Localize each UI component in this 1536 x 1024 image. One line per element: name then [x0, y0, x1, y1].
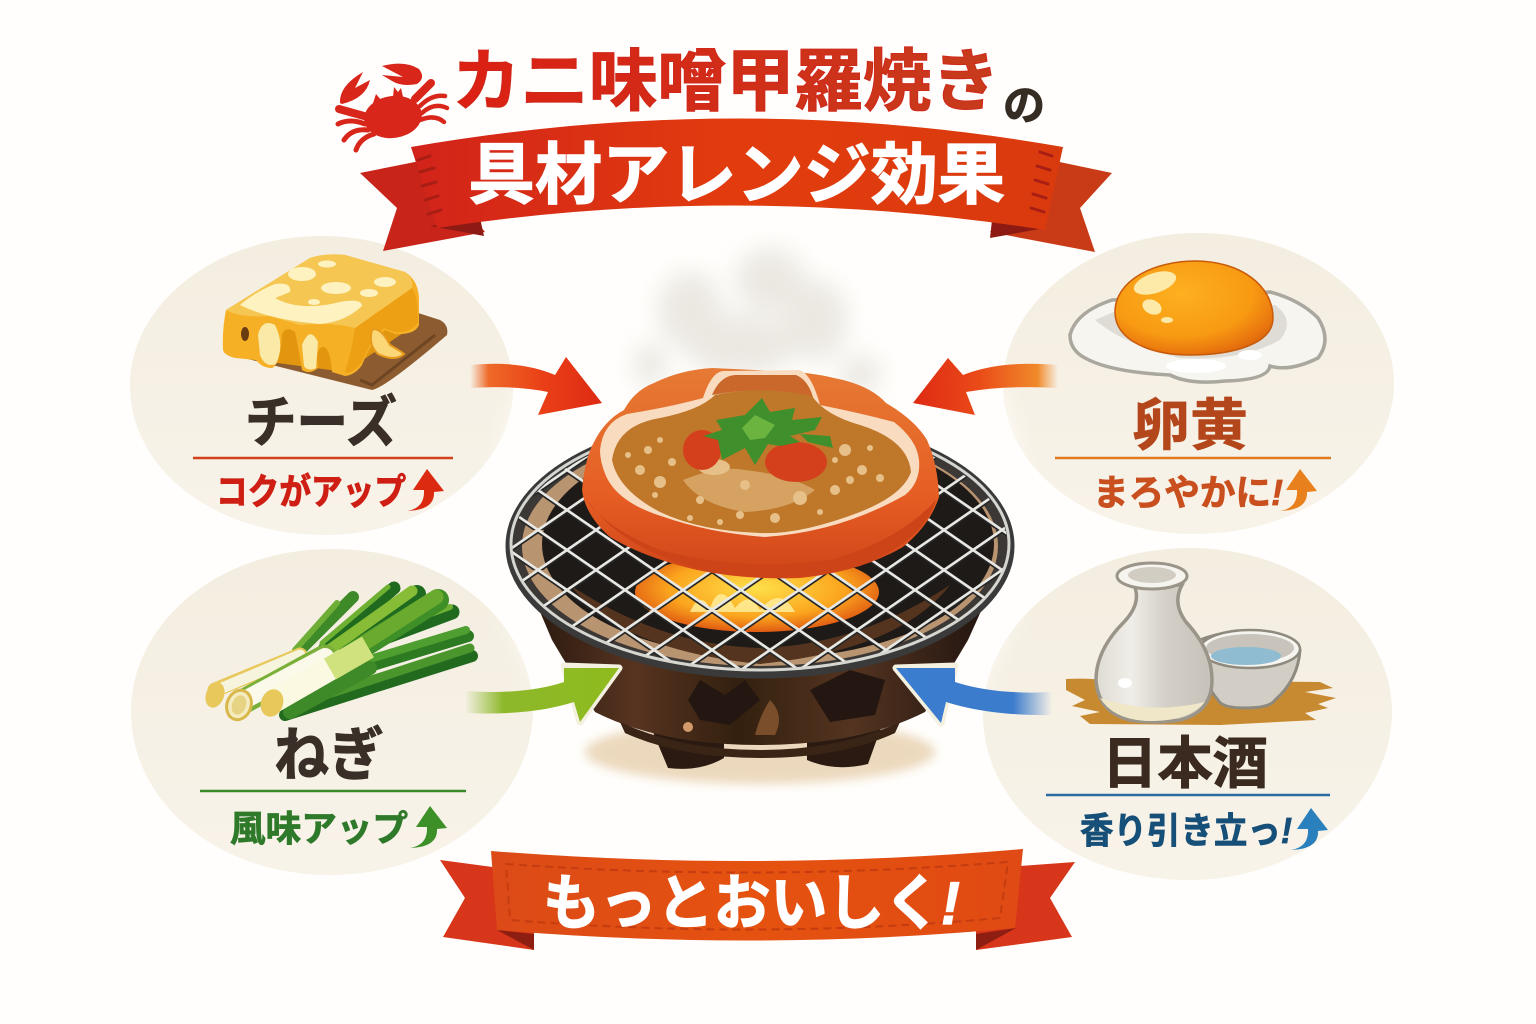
arrow: egg to center — [913, 358, 1058, 415]
cheese circle — [130, 236, 513, 535]
banner: subtitle — [360, 118, 1112, 252]
ground shadow — [585, 720, 935, 784]
tomatoes — [683, 430, 827, 482]
left tail — [440, 860, 534, 950]
icon: egg — [1070, 261, 1325, 382]
effect: green onion: 風味アップ — [230, 808, 408, 849]
arrow: green onion to center — [465, 666, 619, 722]
title: カニ味噌甲羅焼き — [452, 44, 1000, 120]
stitched border — [506, 862, 1008, 930]
right tail — [990, 160, 1112, 252]
icon: up arrow green — [410, 806, 447, 848]
divider: sake — [1046, 794, 1330, 796]
icon: up arrow blue — [1291, 808, 1328, 850]
ribbon body — [491, 849, 1023, 941]
egg circle — [1003, 233, 1394, 534]
grill inner — [508, 416, 1012, 676]
left tail — [360, 160, 485, 251]
divider: egg yolk — [1055, 457, 1331, 459]
effect: cheese: コクがアップ — [216, 471, 406, 512]
crab miso filling — [612, 390, 911, 533]
arrow: sake to center — [896, 666, 1052, 723]
label: cheese: チーズ — [245, 391, 397, 454]
panel: green onion — [131, 549, 533, 875]
effect: sake: 香り引き立っ! — [1080, 810, 1292, 851]
panel: sake — [983, 548, 1392, 880]
wire net — [512, 456, 1007, 672]
icon: cheese — [223, 254, 447, 390]
green onion circle — [131, 549, 533, 875]
right tail — [976, 862, 1075, 950]
clay stove — [535, 600, 986, 769]
grill rim — [509, 417, 1011, 675]
icon: crab — [338, 64, 447, 150]
fire — [635, 552, 879, 632]
divider: green onion — [200, 790, 466, 792]
arrow: cheese to center — [470, 357, 602, 415]
divider: cheese — [193, 457, 453, 459]
conclusion text: もっとおいしく! — [543, 870, 960, 937]
illustration: grill with crab shell — [500, 368, 1020, 784]
icon: green onion — [202, 587, 472, 723]
central illustration white halo — [498, 220, 1022, 820]
icon: up arrow orange — [1280, 469, 1317, 511]
panel: cheese — [130, 236, 513, 535]
sake circle — [983, 548, 1392, 880]
subtitle text: 具材アレンジ効果 — [468, 138, 1005, 213]
icon: sake set — [1066, 563, 1336, 725]
icon: up arrow red — [407, 469, 444, 511]
steam — [634, 248, 880, 395]
panel: egg yolk — [1003, 233, 1394, 534]
title particle: の — [1003, 82, 1045, 129]
label: egg yolk: 卵黄 — [1132, 394, 1248, 457]
banner: conclusion — [440, 849, 1075, 950]
label: sake: 日本酒 — [1102, 732, 1268, 795]
crab shell — [582, 368, 939, 578]
ribbon body — [411, 118, 1063, 230]
label: green onion: ねぎ — [274, 723, 384, 788]
parsley — [703, 398, 833, 465]
effect: egg yolk: まろやかに! — [1093, 472, 1283, 513]
